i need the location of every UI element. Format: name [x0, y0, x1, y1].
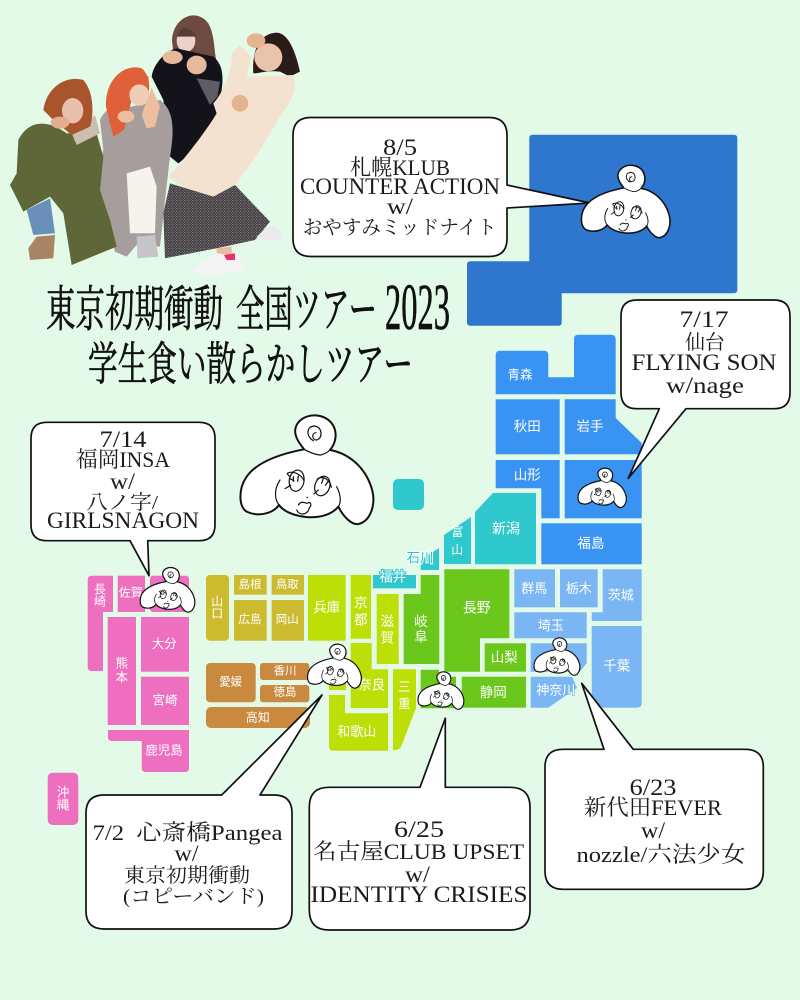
- region: 福島: 福島: [578, 536, 604, 551]
- region: 高知: 高知: [246, 710, 270, 724]
- region: 岐阜: 阜: [414, 628, 428, 644]
- region: 福岡: [150, 576, 189, 612]
- region: 鳥取: [272, 575, 304, 595]
- region: 広島: 広島: [238, 612, 262, 626]
- callout: 6/25 名古屋: 6/25: [394, 817, 444, 842]
- callout: 6/23 新代田: w/: [641, 818, 666, 843]
- region: 栃木: 栃木: [566, 581, 592, 596]
- region: 栃木: [560, 569, 598, 607]
- region: 鹿児島: 鹿児島: [145, 743, 183, 758]
- mascot: 福岡 marker: [140, 568, 195, 612]
- region: 山梨: 山梨: [491, 650, 518, 665]
- region: 静岡: 静岡: [480, 685, 507, 700]
- region: 長野: [444, 569, 509, 672]
- region: 兵庫: [308, 575, 346, 641]
- region: 青森: 青森: [507, 367, 533, 382]
- region: 和歌山: 和歌山: [337, 724, 376, 739]
- region: 宮崎: 宮崎: [152, 693, 178, 708]
- region: 佐賀: 佐賀: [119, 586, 143, 600]
- callout: 7/2 心斎橋: 東京初期衝動: [124, 864, 250, 887]
- title line 1: [46, 271, 450, 344]
- callout: 7/2 心斎橋: (コピーバンド): [123, 886, 264, 908]
- region: 北海道: [470, 138, 734, 323]
- mascot: 東京 marker: [534, 638, 580, 675]
- region: 新潟: 新潟: [492, 520, 520, 536]
- callout: 6/23 新代田: [545, 683, 763, 889]
- region: 島根: [234, 575, 267, 595]
- callout: 6/25 名古屋: 名古屋CLUB UPSET: [313, 839, 525, 864]
- region: 沖縄: 沖: [57, 785, 69, 799]
- region: 高知: [206, 707, 310, 728]
- callout: 6/25 名古屋: IDENTITY CRISIES: [310, 882, 528, 907]
- region: 京都: 都: [354, 612, 367, 628]
- callout: 6/23 新代田: nozzle/六法少女: [576, 842, 746, 867]
- region: 岩手: 岩手: [576, 419, 604, 434]
- callout: 8/5 札幌: おやすみミッドナイト: [303, 217, 497, 239]
- region: 埼玉: [514, 612, 587, 638]
- region: 福島: [541, 523, 642, 564]
- callout: 8/5 札幌: 札幌KLUB: [350, 155, 450, 180]
- callout: 7/17 仙台: 7/17: [680, 307, 728, 332]
- title: [46, 271, 450, 390]
- member: right, cream coat: [163, 33, 300, 275]
- region: 新潟: [475, 493, 536, 564]
- region: 三重: 三: [398, 680, 411, 694]
- region: 岡山: 岡山: [276, 613, 299, 626]
- callout: 8/5 札幌: COUNTER ACTION: [300, 174, 500, 199]
- region: 岡山: [272, 600, 304, 641]
- mascot: 仙台 marker: [578, 468, 626, 508]
- region: 富山: 富: [451, 525, 463, 539]
- region: 長崎: 崎: [94, 595, 106, 609]
- region: 富山: [444, 517, 471, 564]
- region: 京都: [351, 575, 371, 639]
- region: 宮崎: [141, 677, 189, 725]
- region: 三重: [393, 669, 416, 750]
- region: 福井: 福井: [379, 570, 406, 584]
- callout: 7/14 福岡: 7/14: [100, 427, 147, 452]
- member: back, black top: [152, 15, 222, 163]
- region: 群馬: [514, 569, 555, 607]
- callout: 8/5 札幌: w/: [387, 194, 414, 219]
- region: 奈良: 奈良: [358, 678, 385, 692]
- title line 1: 全国ツアー: [236, 282, 377, 337]
- region: 埼玉: 埼玉: [538, 618, 564, 633]
- callout: 6/23 新代田: 6/23: [630, 775, 676, 800]
- member: left, green coat: [10, 79, 117, 265]
- region: 大阪: [329, 660, 346, 690]
- region: 島根: 島根: [238, 577, 262, 591]
- callout: 7/2 心斎橋: w/: [174, 841, 199, 866]
- callout: 8/5 札幌: [293, 118, 590, 256]
- region: 宮城: [565, 460, 642, 518]
- callout: 6/23 新代田: 新代田FEVER: [584, 795, 722, 820]
- title line 2: 学生食い散らかしツアー: [88, 339, 413, 390]
- region: 山口: [206, 575, 229, 641]
- region: 滋賀: 賀: [381, 630, 394, 646]
- region: 静岡: [462, 677, 526, 708]
- region: 香川: [260, 663, 309, 680]
- region: 京都: 京: [354, 596, 367, 610]
- region: 熊本: [108, 617, 136, 725]
- region: 山口: 山: [211, 595, 223, 609]
- region: 岐阜: [404, 575, 439, 664]
- region: 佐渡 island block: [393, 479, 424, 510]
- region: 秋田: 秋田: [514, 419, 541, 434]
- callout: 7/17 仙台: w/nage: [666, 373, 744, 398]
- region: 茨城: 茨城: [608, 588, 634, 602]
- text: 2023: [385, 271, 450, 344]
- photo: four band members: [10, 15, 300, 275]
- region: 山形: 山形: [514, 468, 541, 482]
- region: 千葉: 千葉: [603, 658, 631, 674]
- region: 長崎: 長: [94, 582, 106, 596]
- region: 愛知: [421, 670, 456, 708]
- map of Japan: [48, 138, 734, 825]
- region: 茨城: [592, 569, 642, 621]
- region: 滋賀: 滋: [381, 614, 395, 629]
- region: 岐阜: 岐: [414, 614, 428, 629]
- region: 鳥取: 鳥取: [276, 577, 299, 591]
- region: 熊本: 本: [115, 670, 128, 684]
- region: 和歌山: [329, 695, 388, 751]
- title line 1: 東京初期衝動: [46, 282, 223, 337]
- region: 徳島: 徳島: [274, 685, 296, 699]
- region: 山梨: [485, 643, 526, 672]
- callout: 7/14 福岡: GIRLSNAGON: [47, 508, 199, 533]
- region: 秋田: [496, 399, 560, 454]
- region: 香川: 香川: [274, 665, 296, 678]
- region: 鹿児島: [108, 730, 189, 772]
- mascot: 大阪 marker: [308, 644, 361, 688]
- region: 長野: 長野: [463, 600, 491, 616]
- mascot: 札幌 marker: [581, 165, 670, 238]
- region: 滋賀: [377, 594, 399, 664]
- region: 沖縄: [48, 773, 78, 825]
- region: 群馬: 群馬: [521, 581, 547, 596]
- region: 石川: [406, 548, 439, 570]
- region: 石川: 石川: [406, 550, 434, 566]
- region: 東京: [531, 643, 587, 672]
- callout: 7/17 仙台: 仙台: [685, 331, 725, 354]
- region: 山口: 口: [211, 607, 223, 621]
- region: 大分: [141, 617, 189, 672]
- member: centre, orange hair: [97, 67, 173, 258]
- region: 長崎: [88, 576, 113, 671]
- region: 大分: 大分: [152, 637, 177, 651]
- callout: 6/25 名古屋: [309, 718, 530, 930]
- mascot: 名古屋 marker: [418, 672, 464, 709]
- callout: 8/5 札幌: 8/5: [383, 135, 417, 160]
- region: 岩手: [565, 399, 642, 454]
- callout: 7/14 福岡: [31, 422, 215, 576]
- region: 広島: [234, 600, 267, 641]
- region: 青森: [496, 335, 616, 394]
- callout: 6/25 名古屋: w/: [405, 862, 431, 887]
- region: 沖縄: 縄: [57, 798, 70, 812]
- callout: 7/17 仙台: [621, 300, 790, 478]
- region: 山形: [496, 460, 560, 518]
- callout: 7/14 福岡: 八ノ字/: [86, 491, 158, 514]
- region: 福井: [373, 570, 416, 588]
- region: 徳島: [260, 685, 309, 702]
- callout: 7/14 福岡: w/: [110, 469, 136, 494]
- callout: 7/17 仙台: FLYING SON: [632, 350, 777, 375]
- region: 愛媛: [206, 663, 256, 702]
- region: 神奈川: [531, 677, 577, 708]
- region: 熊本: 熊: [115, 656, 128, 670]
- region: 佐賀: [118, 576, 145, 612]
- region: 愛媛: 愛媛: [219, 675, 243, 688]
- callout: 7/2 心斎橋: [86, 695, 322, 929]
- region: 奈良: [351, 643, 388, 708]
- region: 兵庫: 兵庫: [313, 600, 340, 615]
- region: 三重: 重: [398, 696, 411, 711]
- mascot: large: [240, 415, 373, 524]
- callout: 7/14 福岡: 福岡INSA: [76, 447, 170, 472]
- region: 千葉: [592, 626, 642, 708]
- callout: 7/2 心斎橋: 7/2 心斎橋Pangea: [92, 820, 283, 845]
- region: 神奈川: 神奈川: [536, 682, 575, 698]
- region: 富山: 山: [451, 543, 463, 557]
